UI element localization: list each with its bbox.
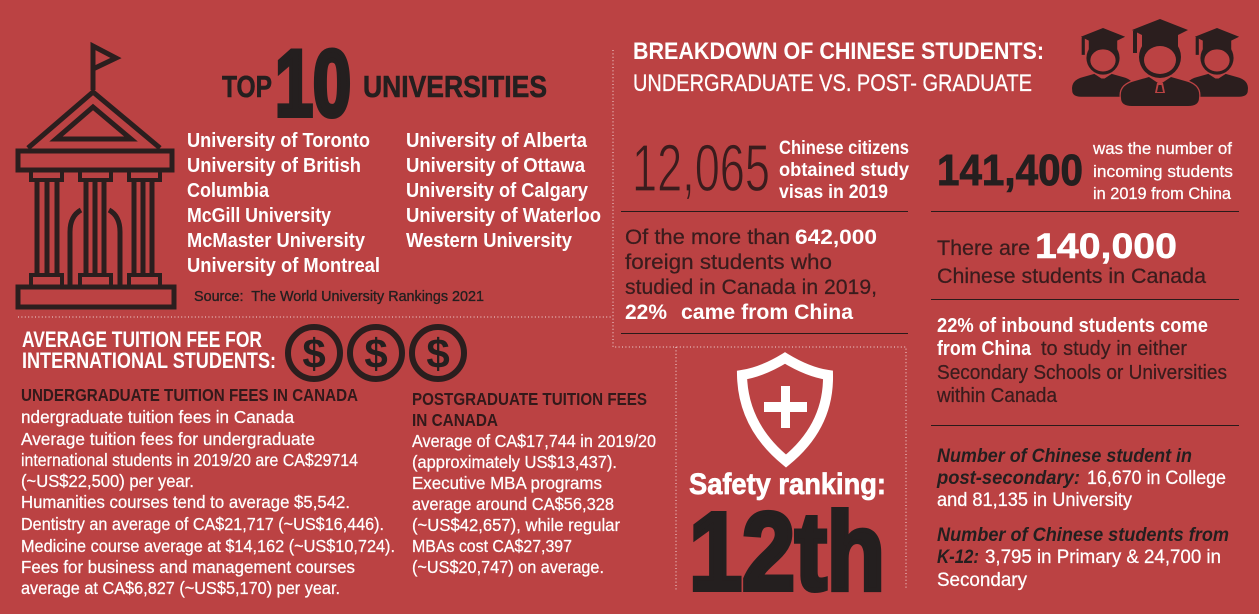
stat: 141,400 incoming students: in 2019 from China <box>1093 184 1232 203</box>
list: universities left column: University of British <box>187 154 361 177</box>
text block: K-12 numbers: K-12: <box>937 546 979 568</box>
heading: breakdown <box>633 38 1044 97</box>
text block: post-secondary numbers: 16,670 in College <box>1087 467 1226 489</box>
text block: post-secondary numbers <box>936 445 1226 511</box>
list: universities right column <box>406 129 601 252</box>
icons: three dollar coins <box>288 327 464 379</box>
text block: 22% of inbound students: 22% of inbound students come <box>937 315 1208 337</box>
text block: undergraduate tuition fees: Humanities courses tend to average $5,542. <box>21 492 350 512</box>
text block: undergraduate tuition fees: average at CA$6,827 (~US$5,170) per year. <box>21 578 340 598</box>
heading: breakdown: BREAKDOWN OF CHINESE STUDENTS: <box>633 38 1044 65</box>
text block: 642,000 foreign students: foreign students who <box>625 250 832 274</box>
text block: post-secondary numbers: post-secondary: <box>936 467 1080 489</box>
stat: 12th: 12th <box>689 490 885 614</box>
stat: 12,065 study visas: 12,065 <box>632 131 770 206</box>
stat: 140,000 Chinese students: There are <box>937 236 1030 260</box>
heading: top 10 universities <box>222 30 547 136</box>
stat: 141,400 incoming students: incoming students <box>1093 162 1233 181</box>
text block: K-12 numbers <box>937 524 1229 591</box>
text block: undergraduate tuition fees: (~US$22,500) per year. <box>21 471 194 491</box>
panel: top 10 universities <box>18 30 601 307</box>
text block: 22% of inbound students: within Canada <box>936 385 1058 407</box>
list: universities left column: McGill University <box>187 204 332 227</box>
icons: three dollar coins: $ <box>364 330 388 377</box>
panel: safety ranking <box>689 358 886 614</box>
list: universities left column <box>187 129 380 277</box>
heading: top 10 universities: UNIVERSITIES <box>363 69 547 104</box>
text block: postgraduate tuition fees: Executive MBA programs <box>412 473 602 493</box>
text block: 642,000 foreign students: Of the more than <box>625 225 790 249</box>
text block: 642,000 foreign students: 22% <box>625 300 667 324</box>
heading: top 10 universities: 10 <box>275 30 351 136</box>
text block: undergraduate tuition fees: UNDERGRADUATE TUITION FEES IN CANADA <box>21 385 358 405</box>
heading: top 10 universities: TOP <box>222 69 272 104</box>
list: universities right column: University of Waterloo <box>406 204 601 227</box>
text block: undergraduate tuition fees: Fees for business and management courses <box>21 557 355 577</box>
icon: shield with cross <box>742 358 828 461</box>
text block: 22% of inbound students: from China <box>937 338 1032 360</box>
list: universities left column: University of Montreal <box>187 254 380 277</box>
text block: 22% of inbound students: to study in either <box>1041 338 1187 360</box>
text block: 642,000 foreign students: 642,000 <box>795 225 877 249</box>
panel: average tuition fee <box>21 327 656 598</box>
source note: Source: The World University Rankings 2021 <box>194 289 484 305</box>
list: universities left column: Columbia <box>187 179 270 202</box>
text block: 22% of inbound students: Secondary Schools or Universities <box>937 362 1227 384</box>
label: safety ranking: Safety ranking: <box>689 468 886 501</box>
icon: university building <box>18 46 174 307</box>
text block: postgraduate tuition fees <box>412 389 656 577</box>
text block: undergraduate tuition fees: Average tuition fees for undergraduate <box>21 429 315 449</box>
text block: postgraduate tuition fees: average around CA$56,328 <box>412 494 614 514</box>
text block: undergraduate tuition fees: Dentistry an average of CA$21,717 (~US$16,446). <box>21 514 384 534</box>
text block: undergraduate tuition fees: international students in 2019/20 are CA$29714 <box>21 450 358 470</box>
list: universities right column: University of Calgary <box>406 179 589 202</box>
text block: undergraduate tuition fees: Medicine course average at $14,162 (~US$10,724). <box>21 536 395 556</box>
text block: undergraduate tuition fees: ndergraduate tuition fees in Canada <box>21 407 294 427</box>
text block: K-12 numbers: 3,795 in Primary & 24,700 in <box>985 546 1221 568</box>
text block: postgraduate tuition fees: IN CANADA <box>412 410 498 430</box>
text block: postgraduate tuition fees: (~US$42,657), while regular <box>412 515 620 535</box>
heading: breakdown: UNDERGRADUATE VS. POST- GRADUATE <box>633 70 1032 97</box>
text block: post-secondary numbers: and 81,135 in University <box>937 489 1132 511</box>
text block: 642,000 foreign students <box>625 225 877 324</box>
text block: 642,000 foreign students: studied in Canada in 2019, <box>625 275 877 299</box>
stat: 141,400 incoming students: was the number of <box>1092 139 1232 158</box>
text block: undergraduate tuition fees <box>21 385 395 598</box>
list: universities left column: University of Toronto <box>187 129 370 152</box>
list: universities right column: University of Alberta <box>406 129 588 152</box>
icons: three dollar coins: $ <box>302 330 326 377</box>
text block: postgraduate tuition fees: MBAs cost CA$27,397 <box>412 536 572 556</box>
heading: average tuition fee: INTERNATIONAL STUDENTS: <box>22 348 276 373</box>
text block: postgraduate tuition fees: (approximately US$13,437). <box>412 452 617 472</box>
stat: 140,000 Chinese students <box>937 227 1206 288</box>
stat: 141,400 incoming students: 141,400 <box>937 146 1083 195</box>
text block: post-secondary numbers: Number of Chinese student in <box>937 445 1192 467</box>
list: universities right column: University of Ottawa <box>406 154 586 177</box>
text block: postgraduate tuition fees: (~US$20,747) on average. <box>412 557 604 577</box>
stat: 141,400 incoming students <box>937 139 1233 203</box>
heading: average tuition fee <box>22 327 276 373</box>
stat: 12,065 study visas: visas in 2019 <box>779 182 888 203</box>
text block: 642,000 foreign students: came from China <box>681 300 854 324</box>
text block: K-12 numbers: Secondary <box>937 569 1027 591</box>
heading: average tuition fee: AVERAGE TUITION FEE FOR <box>22 327 262 352</box>
list: universities right column: Western University <box>406 229 573 252</box>
panel: breakdown of Chinese students <box>625 19 1248 591</box>
stat: 140,000 Chinese students: Chinese students in Canada <box>937 264 1206 288</box>
text block: K-12 numbers: Number of Chinese students from <box>937 524 1229 546</box>
stat: 12,065 study visas: obtained study <box>779 160 909 181</box>
text block: postgraduate tuition fees: POSTGRADUATE TUITION FEES <box>412 389 647 409</box>
text block: 22% of inbound students <box>936 315 1227 407</box>
list: universities left column: McMaster University <box>187 229 366 252</box>
stat: 140,000 Chinese students: 140,000 <box>1035 227 1177 266</box>
stat: 12,065 study visas: Chinese citizens <box>779 138 909 159</box>
text block: postgraduate tuition fees: Average of CA$17,744 in 2019/20 <box>412 431 656 451</box>
icon: three graduates <box>1072 19 1248 106</box>
icons: three dollar coins: $ <box>426 330 450 377</box>
